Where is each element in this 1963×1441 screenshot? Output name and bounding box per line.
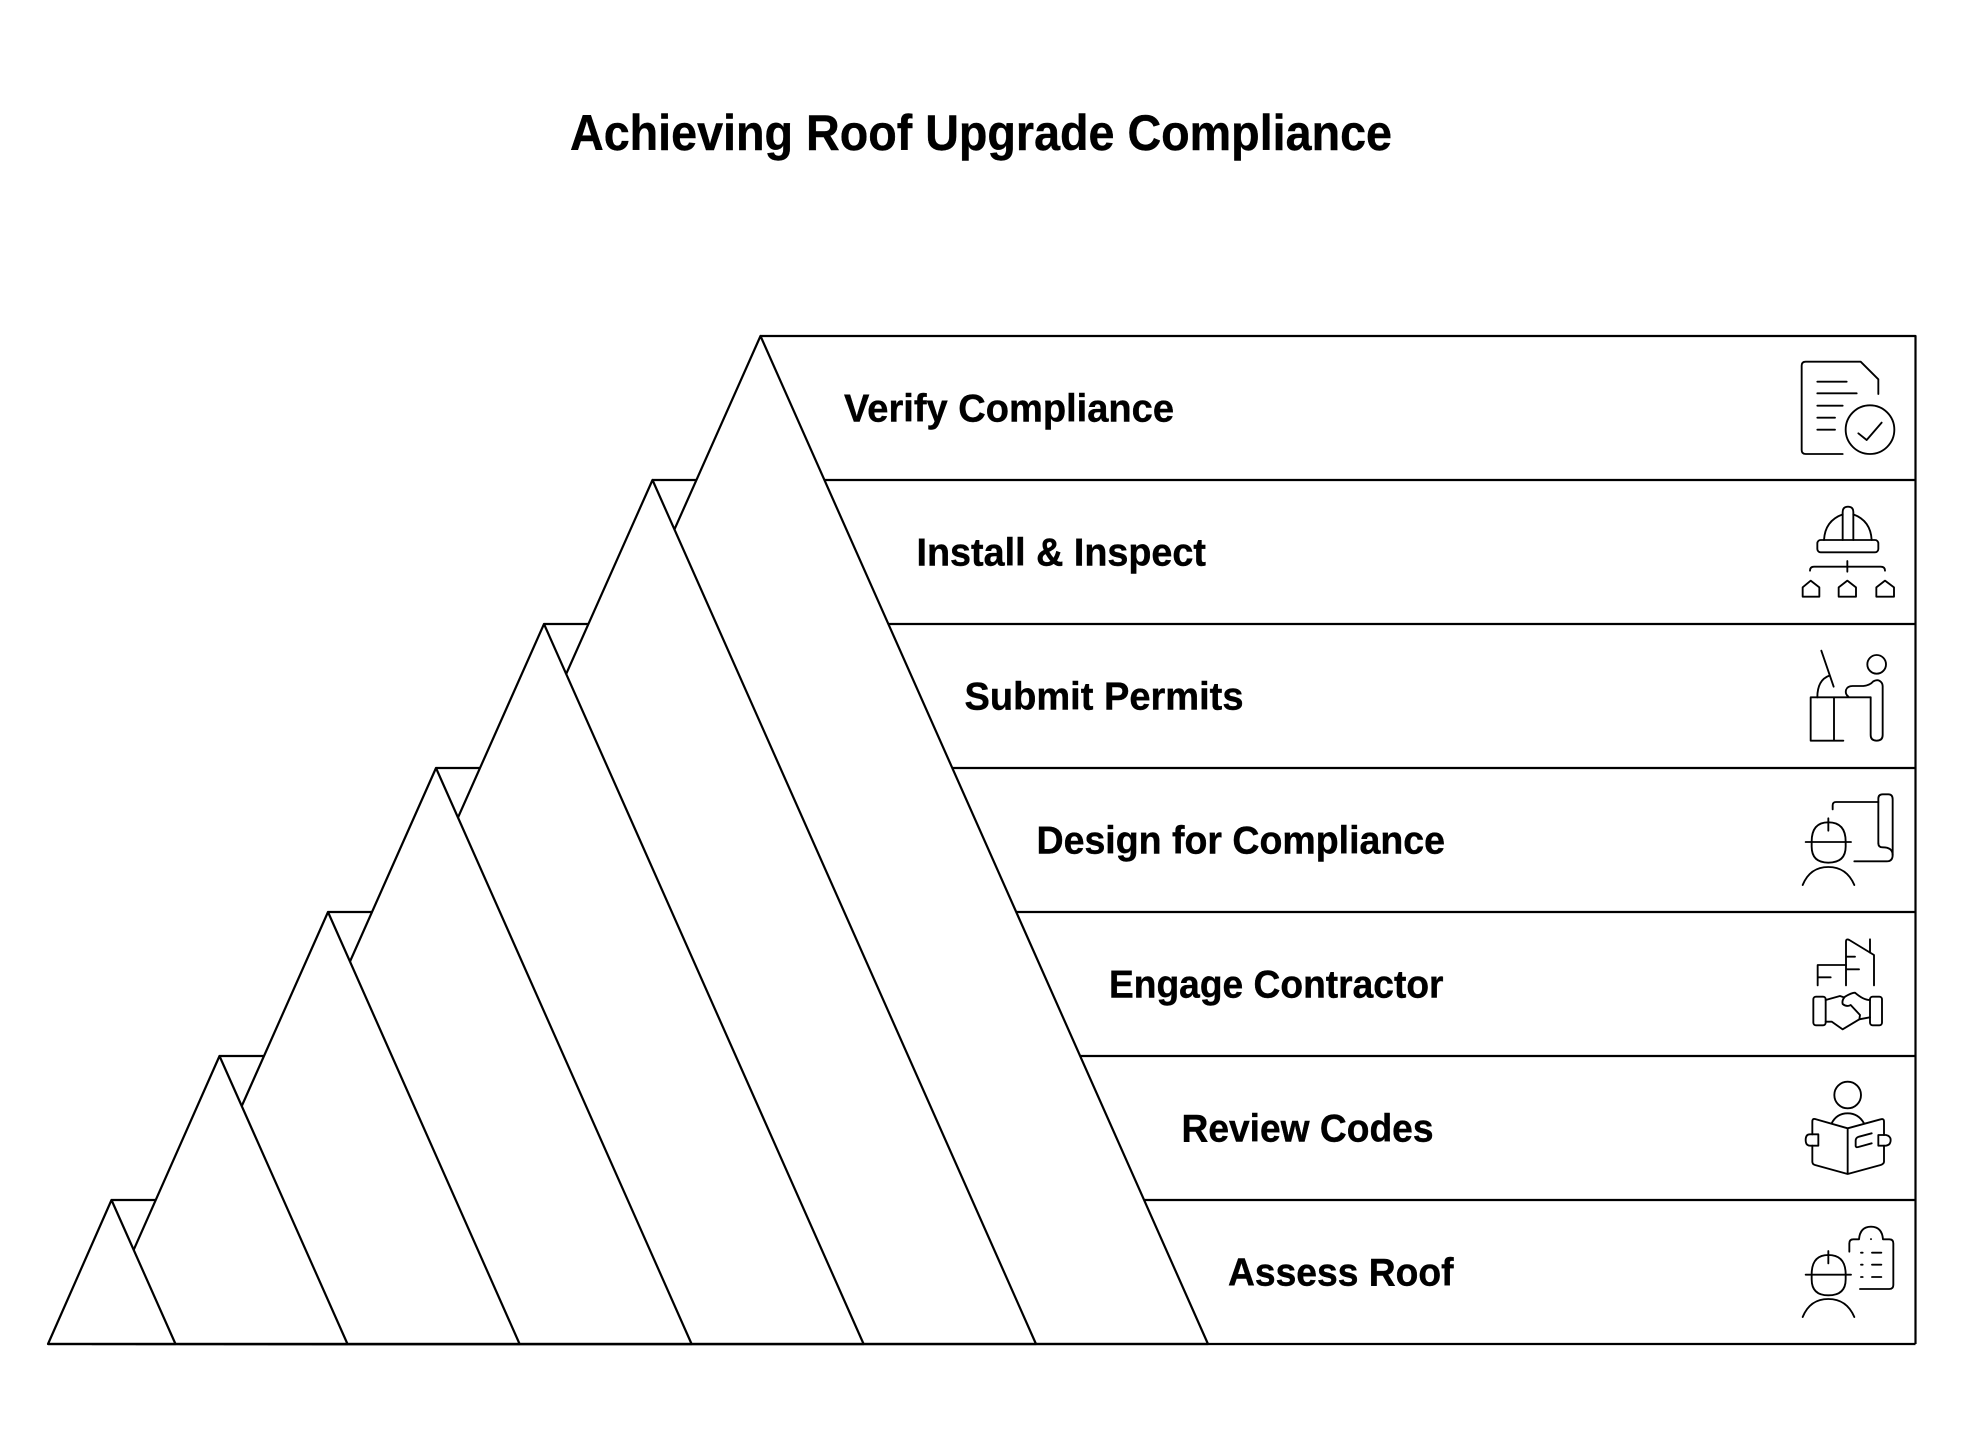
triangle step 1: Assess Roof bbox=[48, 1200, 176, 1344]
icon: document with check bbox=[1802, 362, 1894, 454]
triangle step 4: Design for Compliance bbox=[180, 768, 692, 1344]
label: Engage Contractor: Engage Contractor bbox=[1109, 964, 1444, 1006]
label: Assess Roof: Assess Roof bbox=[1228, 1252, 1454, 1294]
triangle step 5: Submit Permits bbox=[224, 624, 864, 1344]
triangle step 7: Verify Compliance bbox=[312, 336, 1208, 1344]
base line bbox=[48, 1343, 1916, 1345]
title: Achieving Roof Upgrade Compliance bbox=[570, 105, 1392, 161]
label: Install & Inspect: Install & Inspect bbox=[916, 532, 1206, 574]
icon: engineer with clipboard bbox=[1803, 1227, 1893, 1317]
stepped pyramid diagram bbox=[48, 336, 1916, 1344]
icon: person at desk with pointer bbox=[1811, 651, 1886, 741]
label: Submit Permits: Submit Permits bbox=[964, 676, 1244, 718]
icon: hard hat with hierarchy bbox=[1803, 507, 1894, 597]
icon: buildings and handshake bbox=[1813, 939, 1882, 1029]
triangle step 6: Install & Inspect bbox=[268, 480, 1036, 1344]
icon: person reading book bbox=[1806, 1082, 1891, 1174]
triangle step 2: Review Codes bbox=[92, 1056, 348, 1344]
label: Verify Compliance: Verify Compliance bbox=[844, 388, 1174, 430]
icon: engineer with blueprint scroll bbox=[1803, 794, 1893, 885]
row bands outline bbox=[112, 336, 1916, 1344]
label: Review Codes: Review Codes bbox=[1182, 1108, 1434, 1150]
triangle step 3: Engage Contractor bbox=[136, 912, 520, 1344]
label: Design for Compliance: Design for Compliance bbox=[1036, 820, 1445, 862]
